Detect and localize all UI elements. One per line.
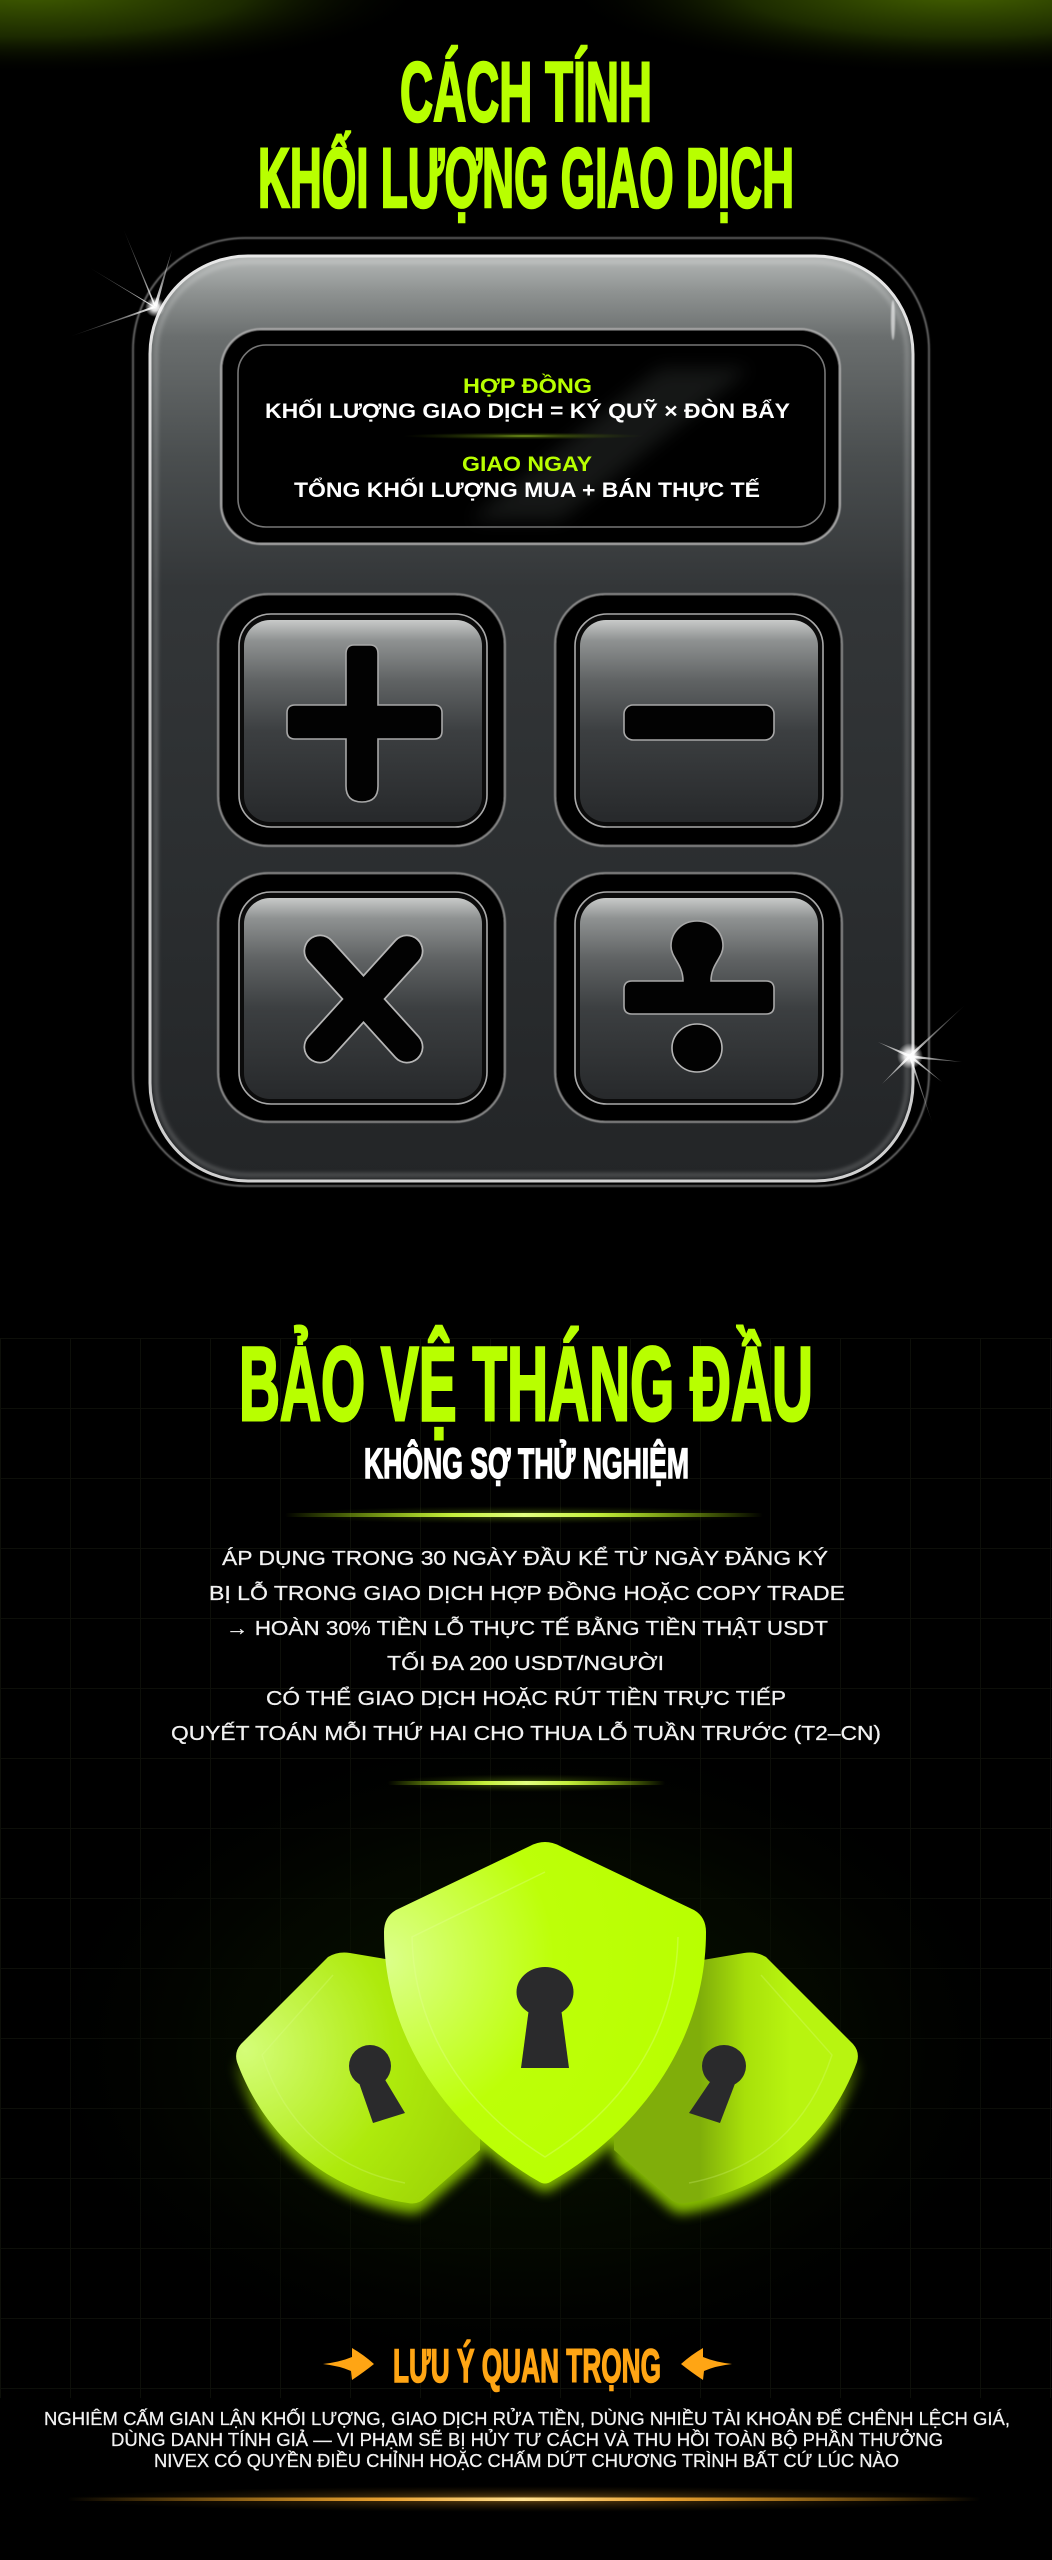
calculator outer outline bbox=[133, 238, 929, 1186]
keyhole: center bbox=[516, 1967, 574, 2068]
note text: NIVEX CÓ QUYỀN ĐIỀU CHỈNH HOẶC CHẤM DỨT CHƯƠNG TRÌNH BẤT CỨ LÚC NÀO bbox=[154, 2450, 899, 2471]
shield: right bbox=[614, 1952, 858, 2203]
note text: DÙNG DANH TÍNH GIẢ — VI PHẠM SẼ BỊ HỦY TƯ CÁCH VÀ THU HỒI TOÀN BỘ PHẦN THƯỞNG bbox=[111, 2429, 943, 2450]
body text: → HOÀN 30% TIỀN LỖ THỰC TẾ BẰNG TIỀN THẬT USDT bbox=[226, 1616, 829, 1640]
body text: TỐI ĐA 200 USDT/NGƯỜI bbox=[387, 1651, 664, 1675]
screen formula: contract: KHỐI LƯỢNG GIAO DỊCH = KÝ QUỸ × ĐÒN BẨY bbox=[265, 399, 790, 423]
divider glow: orange bbox=[66, 2486, 986, 2512]
screen text: contract: HỢP ĐỒNG bbox=[463, 374, 592, 398]
body text bbox=[171, 1547, 881, 1745]
divider glow bbox=[386, 1774, 666, 1792]
title bbox=[258, 45, 794, 225]
calculator bbox=[66, 228, 965, 1186]
keyhole: right bbox=[689, 2045, 746, 2123]
key: multiply bbox=[218, 873, 505, 1122]
screen formula: spot: TỔNG KHỐI LƯỢNG MUA + BÁN THỰC TẾ bbox=[294, 478, 760, 502]
calculator body bbox=[150, 256, 913, 1181]
divider glow bbox=[284, 1506, 764, 1524]
arrow: left bbox=[323, 2348, 374, 2380]
key: plus bbox=[218, 594, 505, 846]
highlight: top right edge bbox=[891, 300, 895, 340]
shield: center bbox=[384, 1842, 706, 2184]
body text: BỊ LỖ TRONG GIAO DỊCH HỢP ĐỒNG HOẶC COPY TRADE bbox=[209, 1581, 845, 1605]
screen divider glow bbox=[402, 432, 646, 440]
shield glow bbox=[230, 2056, 864, 2222]
shield: left bbox=[236, 1952, 480, 2203]
arrow: right bbox=[681, 2348, 732, 2380]
keyhole: left bbox=[349, 2045, 405, 2123]
note text: NGHIÊM CẤM GIAN LẬN KHỐI LƯỢNG, GIAO DỊCH RỬA TIỀN, DÙNG NHIỀU TÀI KHOẢN ĐỂ CHÊNH LỆCH GIÁ, bbox=[44, 2408, 1010, 2429]
body text: ÁP DỤNG TRONG 30 NGÀY ĐẦU KỂ TỪ NGÀY ĐĂNG KÝ bbox=[222, 1547, 828, 1570]
sparkle: top left bbox=[66, 228, 172, 338]
sparkle: bottom right bbox=[878, 1005, 965, 1122]
shields illustration bbox=[236, 1842, 858, 2213]
key: minus bbox=[555, 594, 842, 846]
note text bbox=[44, 2408, 1010, 2471]
calculator screen bbox=[221, 329, 840, 544]
heading: important note: LƯU Ý QUAN TRỌNG bbox=[393, 2339, 661, 2392]
key: divide bbox=[555, 873, 842, 1122]
title: CÁCH TÍNH bbox=[400, 45, 652, 139]
screen text: spot: GIAO NGAY bbox=[462, 453, 592, 476]
body text: CÓ THỂ GIAO DỊCH HOẶC RÚT TIỀN TRỰC TIẾP bbox=[266, 1687, 786, 1710]
subheading: KHÔNG SỢ THỬ NGHIỆM bbox=[364, 1439, 689, 1488]
body text: QUYẾT TOÁN MỖI THỨ HAI CHO THUA LỖ TUẦN TRƯỚC (T2–CN) bbox=[171, 1721, 881, 1745]
